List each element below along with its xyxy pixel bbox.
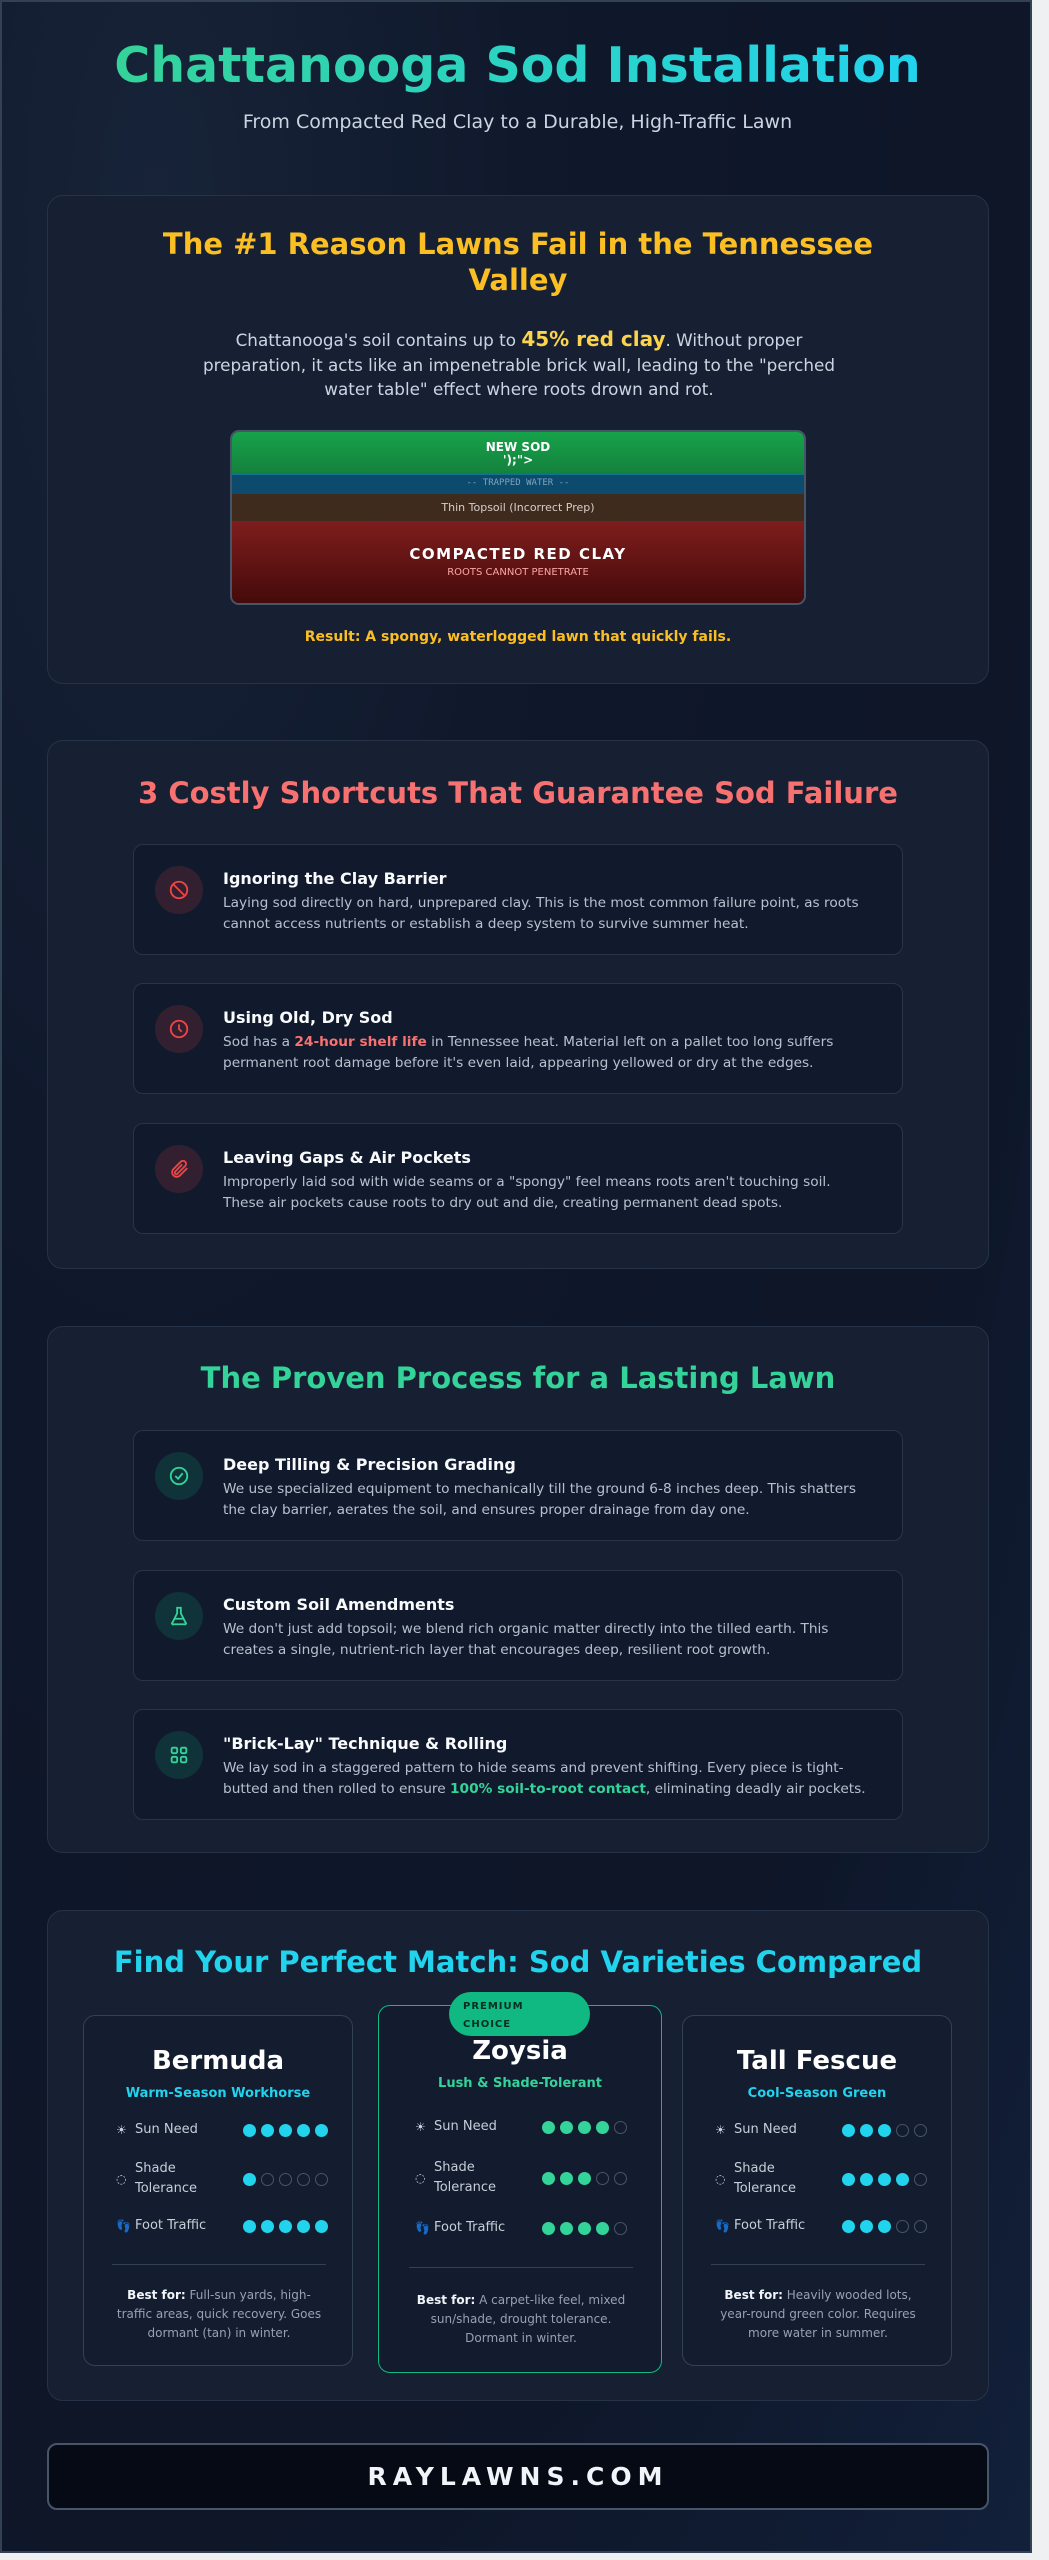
- panel: costly shortcuts: [47, 740, 989, 1269]
- card: zoysia: Zoysia: [472, 2036, 568, 2066]
- rating: sun: Sun Need: [734, 2122, 797, 2137]
- card: old dry sod: [133, 983, 903, 1094]
- rating: shade: ◌: [715, 2172, 725, 2186]
- icon: flask: [155, 1592, 203, 1640]
- rating: shade: Tolerance: [434, 2180, 496, 2195]
- icon: prohibited: [155, 866, 203, 914]
- rating: shade: Tolerance: [734, 2181, 796, 2196]
- rating: sun: [116, 2122, 328, 2137]
- card: soil amendments: We don't just add topsoil; we blend rich organic matter directly into the tilled earth. This creates a single, nutrient-rich layer that encourages deep, resilient root growth.: [223, 1621, 828, 1658]
- rating: traffic: Foot Traffic: [734, 2218, 805, 2233]
- rating: sun: Sun Need: [434, 2119, 497, 2134]
- rating: sun: ☀: [715, 2123, 726, 2137]
- card: tall fescue: [682, 2015, 952, 2366]
- rating: shade: [415, 2160, 627, 2195]
- card: old dry sod: Using Old, Dry Sod: [223, 1008, 393, 1027]
- card: gaps & air pockets: [133, 1123, 903, 1234]
- card: tall fescue: Best for: Heavily wooded lots, year-round green color. Requires more water in summer.: [720, 2288, 916, 2340]
- rating: shade: Shade: [734, 2161, 775, 2176]
- heading: The Proven Process for a Lasting Lawn: [201, 1361, 835, 1395]
- layer: topsoil: [232, 494, 804, 521]
- layer: red clay: COMPACTED RED CLAY: [409, 545, 627, 563]
- panel: proven process: [47, 1326, 989, 1853]
- rating: traffic: [715, 2218, 927, 2233]
- rating: traffic: 👣: [116, 2219, 131, 2233]
- card: tall fescue: Tall Fescue: [737, 2046, 897, 2076]
- rating: shade: Shade: [434, 2160, 475, 2175]
- heading: The #1 Reason Lawns Fail in the Tennessee Valley: [163, 227, 873, 297]
- rating: traffic: [116, 2218, 328, 2233]
- callout: result: Result: A spongy, waterlogged lawn that quickly fails.: [305, 629, 731, 645]
- subtitle: From Compacted Red Clay to a Durable, High-Traffic Lawn: [243, 111, 792, 133]
- card: tall fescue: Cool-Season Green: [748, 2086, 886, 2101]
- rating: sun: [415, 2119, 627, 2134]
- heading: 3 Costly Shortcuts That Guarantee Sod Failure: [138, 776, 898, 810]
- layer: new sod: NEW SOD: [486, 440, 550, 454]
- badge: premium choice: PREMIUM: [463, 2001, 524, 2012]
- text block: clay explanation: Chattanooga's soil contains up to 45% red clay. Without proper preparation, it acts like an impenetrable brick wall, leading to the "perched water table" effect where roots drown and rot.: [203, 327, 835, 399]
- icon: paperclip: [155, 1145, 203, 1193]
- card: zoysia: [378, 2005, 662, 2373]
- card: brick-lay: "Brick-Lay" Technique & Rolling: [223, 1734, 507, 1753]
- card: deep tilling: We use specialized equipment to mechanically till the ground 6-8 inches deep. This shatters the clay barrier, aerates the soil, and ensures proper drainage from day one.: [223, 1481, 856, 1518]
- rating: traffic: Foot Traffic: [434, 2220, 505, 2235]
- rating: sun: Sun Need: [135, 2122, 198, 2137]
- card: soil amendments: [133, 1570, 903, 1681]
- card: brick-lay: We lay sod in a staggered pattern to hide seams and prevent shifting. Every piece is tight-butted and then rolled to ensure 100% soil-to-root contact, eliminating deadly air pockets.: [223, 1760, 866, 1797]
- card: deep tilling: [133, 1430, 903, 1541]
- rating: shade: [116, 2161, 328, 2196]
- layer: trapped water: -- TRAPPED WATER --: [467, 478, 569, 488]
- card: old dry sod: Sod has a 24-hour shelf life in Tennessee heat. Material left on a pallet too long suffers permanent root damage before it's even laid, appearing yellowed or dry at the edges.: [223, 1034, 833, 1071]
- diagram: soil layers: [230, 430, 806, 605]
- icon: grid: [155, 1731, 203, 1779]
- card: ignoring clay barrier: Laying sod directly on hard, unprepared clay. This is the most common failure point, as roots cannot access nutrients or establish a deep system to survive summer heat.: [223, 895, 859, 932]
- layer: red clay: ROOTS CANNOT PENETRATE: [447, 567, 589, 578]
- rating: shade: [715, 2161, 927, 2196]
- rating: traffic: [415, 2220, 627, 2235]
- card: deep tilling: Deep Tilling & Precision Grading: [223, 1455, 516, 1474]
- badge: premium choice: [449, 1992, 590, 2036]
- icon: check: [155, 1452, 203, 1500]
- footer: website: RAYLAWNS.COM: [368, 2462, 668, 2491]
- panel: sod varieties: [47, 1910, 989, 2401]
- rating: shade: Shade: [135, 2161, 176, 2176]
- icon: clock: [155, 1005, 203, 1053]
- layer: new sod: ');">: [503, 453, 533, 467]
- rating: sun: [715, 2122, 927, 2137]
- card: gaps & air pockets: Leaving Gaps & Air Pockets: [223, 1148, 471, 1167]
- card: bermuda: Best for: Full-sun yards, high-traffic areas, quick recovery. Goes dormant (tan) in winter.: [117, 2288, 321, 2340]
- rating: sun: ☀: [116, 2123, 127, 2137]
- card: bermuda: Warm-Season Workhorse: [126, 2086, 310, 2101]
- card: gaps & air pockets: Improperly laid sod with wide seams or a "spongy" feel means roots aren't touching soil. These air pockets cause roots to dry out and die, creating permanent dead spots.: [223, 1174, 831, 1211]
- card: zoysia: Lush & Shade-Tolerant: [438, 2076, 602, 2091]
- rating: traffic: 👣: [415, 2221, 430, 2235]
- panel: red clay problem: [47, 195, 989, 684]
- rating: shade: Tolerance: [135, 2181, 197, 2196]
- badge: premium choice: CHOICE: [463, 2019, 511, 2030]
- layer: red clay: [232, 521, 804, 603]
- title: Chattanooga Sod Installation: [114, 37, 921, 94]
- card: ignoring clay barrier: Ignoring the Clay Barrier: [223, 869, 447, 888]
- heading: Find Your Perfect Match: Sod Varieties Compared: [114, 1945, 922, 1979]
- layer: topsoil: Thin Topsoil (Incorrect Prep): [441, 501, 595, 514]
- rating: shade: ◌: [415, 2171, 425, 2185]
- card: soil amendments: Custom Soil Amendments: [223, 1595, 454, 1614]
- footer: website: [47, 2443, 989, 2510]
- rating: sun: ☀: [415, 2120, 426, 2134]
- card: ignoring clay barrier: [133, 844, 903, 955]
- rating: traffic: 👣: [715, 2219, 730, 2233]
- layer: trapped water: [232, 474, 804, 494]
- rating: traffic: Foot Traffic: [135, 2218, 206, 2233]
- rating: shade: ◌: [116, 2172, 126, 2186]
- layer: new sod: [232, 432, 804, 474]
- card: zoysia: Best for: A carpet-like feel, mixed sun/shade, drought tolerance. Dormant in winter.: [417, 2293, 625, 2345]
- card: brick-lay: [133, 1709, 903, 1820]
- card: bermuda: Bermuda: [152, 2046, 284, 2076]
- card: bermuda: [83, 2015, 353, 2366]
